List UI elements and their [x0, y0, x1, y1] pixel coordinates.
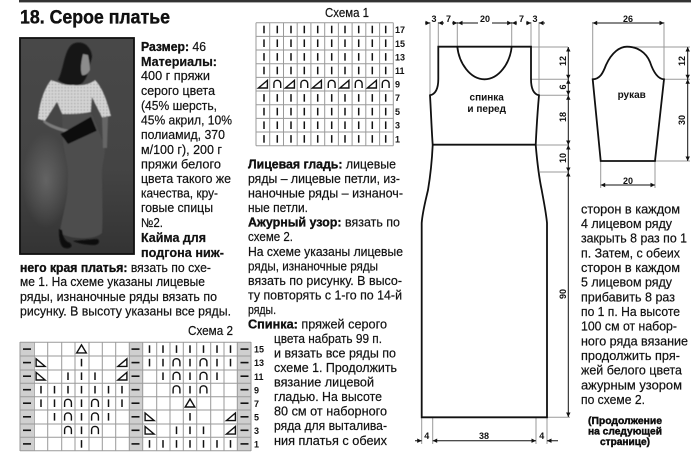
face — [81, 54, 90, 75]
chart: knitting scheme 2 — [20, 342, 264, 451]
text: instructions continued: продолжить пря- — [581, 349, 680, 363]
text: instructions continued: 5 лицевом ряду — [581, 276, 673, 290]
chart: knitting scheme 1: 11 — [395, 66, 405, 76]
label: sleeve: рукав — [618, 90, 646, 101]
right height dimensions: 18 — [558, 112, 568, 122]
chart: knitting scheme 2: 9 — [254, 386, 259, 396]
text: instructions continued — [581, 202, 688, 407]
extension lines — [422, 22, 570, 444]
text: hem edging: рисунку. В высоту указаны все ряды. — [20, 304, 231, 318]
text: size and materials: пряжи белого — [141, 158, 221, 172]
text: back instructions — [248, 318, 397, 448]
chart: knitting scheme 1: 15 — [395, 39, 405, 49]
text: stitch descriptions: ряды. — [248, 303, 276, 317]
sleeve width top — [593, 14, 664, 25]
chart: knitting scheme 1: 17 — [395, 25, 405, 35]
text: size and materials: Материалы: — [141, 55, 217, 69]
text: back instructions: гладью. На высоте — [274, 390, 382, 404]
chart: knitting scheme 2: 11 — [254, 372, 264, 382]
sleeve pattern — [593, 14, 690, 188]
text: back instructions: цвета набрать 99 п. — [274, 332, 382, 346]
waist seam — [433, 144, 536, 146]
text: instructions continued: жей белого цвета — [581, 364, 682, 378]
top dimensions: 3 — [431, 14, 437, 24]
neckline — [457, 47, 512, 79]
text: instructions continued: по 1 п. На высоте — [581, 305, 680, 319]
text: hem edging: ме 1. На схеме указаны лицевые — [20, 275, 205, 289]
text: instructions continued: по схеме 2. — [581, 393, 645, 407]
text: instructions continued: 100 см от набор- — [581, 320, 677, 334]
text: back instructions: 80 см от наборного — [274, 404, 387, 418]
title: 18. Серое платье — [20, 6, 170, 28]
text: size and materials: серого цвета — [141, 84, 215, 98]
chart: knitting scheme 2: 13 — [254, 358, 264, 368]
sleeve height: 30 — [677, 115, 687, 125]
text: hem edging — [20, 231, 231, 318]
text: back instructions: и вязать все ряды по — [274, 346, 396, 360]
right height dimensions: 10 — [558, 153, 568, 163]
hair — [58, 42, 92, 86]
chart: knitting scheme 2: 5 — [254, 412, 259, 422]
text: instructions continued: п. Затем, с обеих — [581, 246, 681, 260]
text: stitch descriptions: ряды – лицевые петли, из- — [248, 172, 400, 186]
sleeve width top: 26 — [623, 14, 633, 24]
text: size and materials: 45% акрил, 10% — [141, 114, 232, 128]
top rule — [19, 0, 691, 2]
photo: woman in grey dress — [20, 38, 134, 254]
text: instructions continued: 4 лицевом ряду — [581, 217, 673, 231]
text: size and materials: (45% шерсть, — [141, 99, 217, 113]
text: back instructions: ния платья с обеих — [274, 434, 388, 448]
chart: knitting scheme 2: 3 — [254, 426, 259, 436]
text: stitch descriptions: наночные ряды – изнаноч- — [248, 186, 403, 200]
text: instructions continued: ажурным узором — [581, 378, 682, 392]
text: stitch descriptions: вязать по рисунку. В высо- — [248, 274, 402, 288]
top dimensions: 3 — [532, 14, 538, 24]
text: back instructions: схеме 1. Продолжить — [274, 361, 397, 375]
text: instructions continued: ного ряда вязание — [581, 334, 688, 348]
heading: scheme 2: Схема 2 — [188, 323, 233, 338]
sleeve width bottom: 20 — [623, 176, 633, 186]
chart: knitting scheme 1: 3 — [395, 120, 400, 130]
text: stitch descriptions: схеме 2. — [248, 230, 293, 244]
label: back and front: спинка — [470, 92, 504, 104]
text: back instructions: ряда для выталива- — [274, 419, 387, 433]
sleeve height: 12 — [677, 56, 687, 66]
text: size and materials — [141, 40, 232, 230]
text: back instructions: Спинка: пряжей серого — [248, 318, 387, 332]
text: size and materials: полиамид, 370 — [141, 128, 225, 142]
text: instructions continued: сторон в каждом — [581, 261, 680, 275]
text: stitch descriptions: ряды, изнаночные ряды — [248, 260, 378, 274]
text: instructions continued: прибавить 8 раз — [581, 290, 675, 304]
dress outline — [422, 47, 547, 417]
top dimensions: 20 — [480, 14, 490, 24]
text: hem edging: Кайма для — [141, 231, 206, 245]
right height dimensions: 90 — [558, 289, 568, 299]
text: stitch descriptions — [248, 158, 403, 317]
text: size and materials: говые спицы — [141, 201, 213, 215]
top dimensions — [425, 14, 545, 25]
forearm — [43, 120, 78, 134]
chart: knitting scheme 1: 7 — [395, 93, 400, 103]
text: instructions continued: закрыть 8 раз по 1 — [581, 232, 687, 246]
note: continued on next page: (Продолжение — [588, 415, 662, 427]
text: back instructions: вязание лицевой — [274, 376, 374, 390]
top dimensions: 7 — [519, 14, 524, 24]
chart: knitting scheme 2: 15 — [254, 344, 264, 354]
top dimensions: 7 — [446, 14, 451, 24]
chart: knitting scheme 2: 7 — [254, 399, 259, 409]
text: hem edging: ряды, изнаночные ряды вязать по — [20, 290, 217, 304]
text: stitch descriptions: На схеме указаны лицевые — [248, 245, 403, 259]
bottom dimensions — [415, 431, 558, 443]
text: stitch descriptions: Ажурный узор: вязать по — [248, 216, 400, 230]
clutch — [61, 117, 97, 144]
right height dimensions: 6 — [558, 84, 568, 90]
bottom dimensions: 4 — [424, 431, 429, 441]
text: stitch descriptions: ту повторять с 1-го по 14-й — [248, 288, 402, 302]
sleeve outline — [593, 47, 664, 161]
text: stitch descriptions: ные петли. — [248, 201, 308, 215]
text: size and materials: 400 г пряжи — [141, 69, 210, 83]
text: size and materials: №2. — [141, 216, 163, 230]
lace top — [38, 80, 111, 121]
chart: knitting scheme 1: 5 — [395, 107, 400, 117]
right height dimensions — [558, 47, 570, 417]
chart: knitting scheme 1: 9 — [395, 80, 400, 90]
chart: knitting scheme 1: 13 — [395, 52, 405, 62]
right height dimensions: 12 — [558, 56, 568, 66]
text: hem edging: подгона ниж- — [141, 246, 224, 260]
label: back and front — [467, 92, 507, 115]
text: instructions continued: сторон в каждом — [581, 202, 680, 216]
dress pattern: back and front — [415, 14, 570, 444]
bottom dimensions: 38 — [479, 431, 489, 441]
label: back and front: и перед — [467, 104, 507, 115]
heading: scheme 1: Схема 1 — [325, 5, 369, 20]
bottom dimensions: 4 — [539, 431, 544, 441]
skirt — [60, 114, 105, 238]
note: continued on next page: странице) — [600, 436, 650, 448]
chart: knitting scheme 1 — [256, 23, 405, 146]
sleeve width bottom — [601, 176, 655, 187]
chart: knitting scheme 1: 1 — [395, 134, 400, 144]
text: size and materials: м/100 г), 200 г — [141, 143, 222, 157]
sleeve height — [677, 47, 690, 161]
note: continued on next page: на следующей — [588, 426, 662, 438]
text: size and materials: качества, кру- — [141, 186, 218, 200]
right arm — [102, 116, 108, 148]
text: size and materials: цвета такого же — [141, 172, 231, 186]
text: size and materials: Размер: 46 — [141, 40, 206, 54]
chart: knitting scheme 2: 1 — [254, 440, 259, 450]
text: stitch descriptions: Лицевая гладь: лицевые — [248, 158, 396, 172]
text: hem edging: него края платья: вязать по схе- — [20, 261, 211, 275]
shoes — [59, 229, 99, 248]
note: continued on next page — [588, 415, 662, 448]
